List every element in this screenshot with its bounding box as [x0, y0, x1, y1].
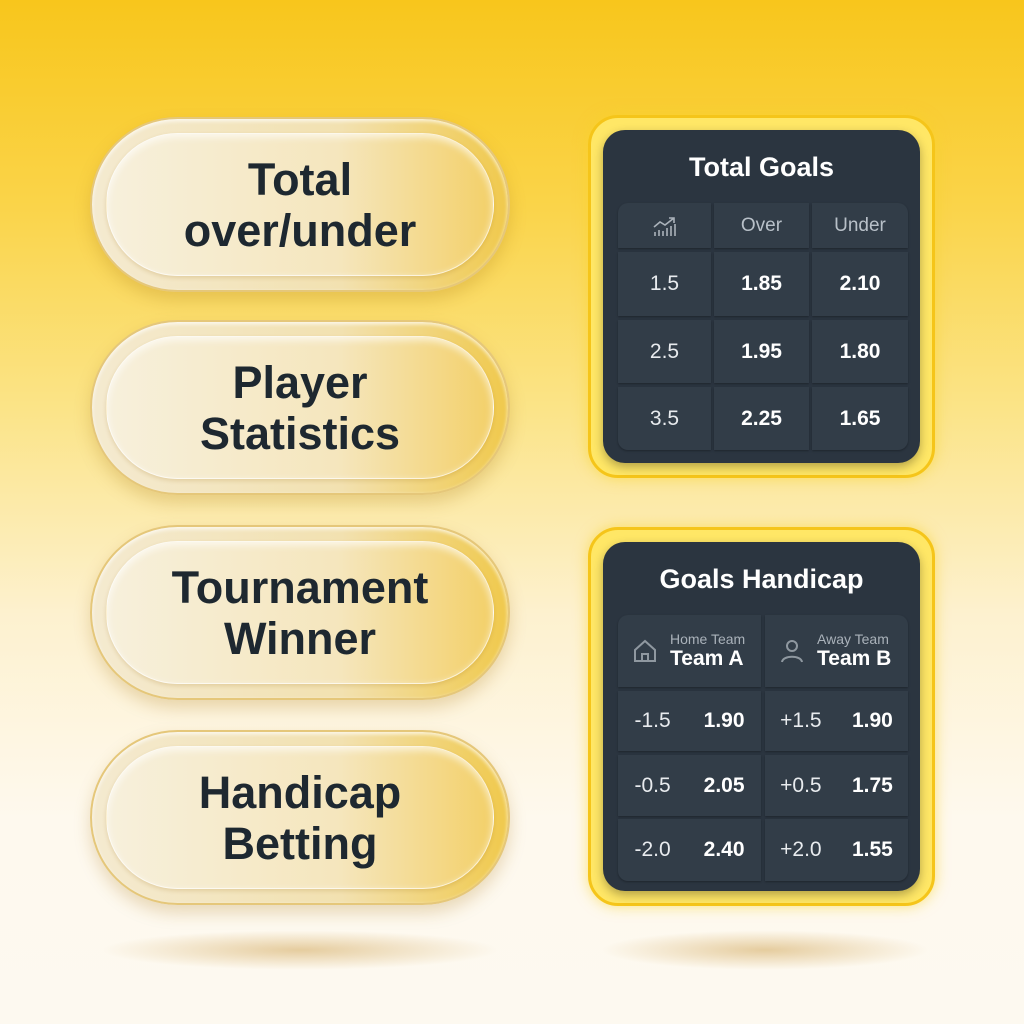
header cell: chart icon	[618, 203, 711, 248]
floor shadow right	[600, 930, 930, 970]
header: Away Team B	[765, 615, 908, 687]
pill: Total over/under: over/under	[184, 204, 416, 256]
panel: Goals Handicap: +2.0	[780, 838, 822, 861]
panel: Total Goals: 1.80	[840, 340, 880, 362]
panel: Total Goals: Over	[741, 214, 782, 236]
panel: Goals Handicap: 1.55	[852, 838, 893, 861]
heading: Total Goals: Total Goals	[689, 152, 834, 182]
panel: Total Goals: Under	[834, 214, 886, 236]
panel: Goals Handicap: +0.5	[780, 774, 822, 796]
header: Home Team A: Team A	[670, 647, 744, 670]
pill: Player Statistics: Statistics	[200, 408, 400, 458]
panel: Goals Handicap	[588, 527, 935, 906]
pill: Total over/under	[90, 117, 510, 292]
header: Away Team B: Team B	[817, 647, 891, 670]
pill: Total over/under: Total	[248, 154, 352, 204]
panel: Total Goals: 1.5	[650, 272, 679, 295]
floor shadow left	[100, 930, 500, 970]
panel: Goals Handicap: -1.5	[634, 709, 671, 732]
panel: Goals Handicap: -0.5	[634, 774, 671, 796]
panel: Goals Handicap: 2.40	[704, 838, 745, 861]
pill: Player Statistics: Player	[232, 356, 368, 408]
pill: Tournament Winner: Winner	[224, 612, 376, 664]
panel: Total Goals: 1.65	[840, 406, 880, 430]
panel: Goals Handicap: +1.5	[780, 709, 822, 732]
panel: Goals Handicap: 1.90	[704, 709, 745, 732]
panel: Total Goals: 1.85	[741, 272, 782, 295]
panel: Total Goals: 2.10	[840, 272, 880, 295]
pill: Handicap Betting: Betting	[222, 818, 377, 868]
pill: Handicap Betting: Handicap	[199, 766, 401, 818]
pill: Tournament Winner	[90, 525, 510, 700]
pill: Handicap Betting	[90, 730, 510, 905]
panel: Goals Handicap: 1.90	[852, 709, 893, 732]
panel: Total Goals: 2.5	[650, 340, 679, 362]
panel: Goals Handicap: 1.75	[852, 774, 893, 796]
pill: Tournament Winner: Tournament	[172, 562, 428, 612]
pill: Player Statistics	[90, 320, 510, 495]
header: Home Team A	[618, 615, 761, 687]
header: Away Team B: Away Team	[817, 631, 889, 647]
panel: Goals Handicap: 2.05	[704, 774, 745, 796]
header: Home Team A: Home Team	[670, 631, 745, 647]
panel: Total Goals: 1.95	[741, 340, 782, 362]
panel: Total Goals	[588, 115, 935, 478]
panel: Goals Handicap: -2.0	[634, 838, 671, 861]
panel: Total Goals: 3.5	[650, 406, 679, 430]
panel: Total Goals: 2.25	[741, 406, 782, 430]
heading: Goals Handicap: Goals Handicap	[659, 564, 864, 594]
